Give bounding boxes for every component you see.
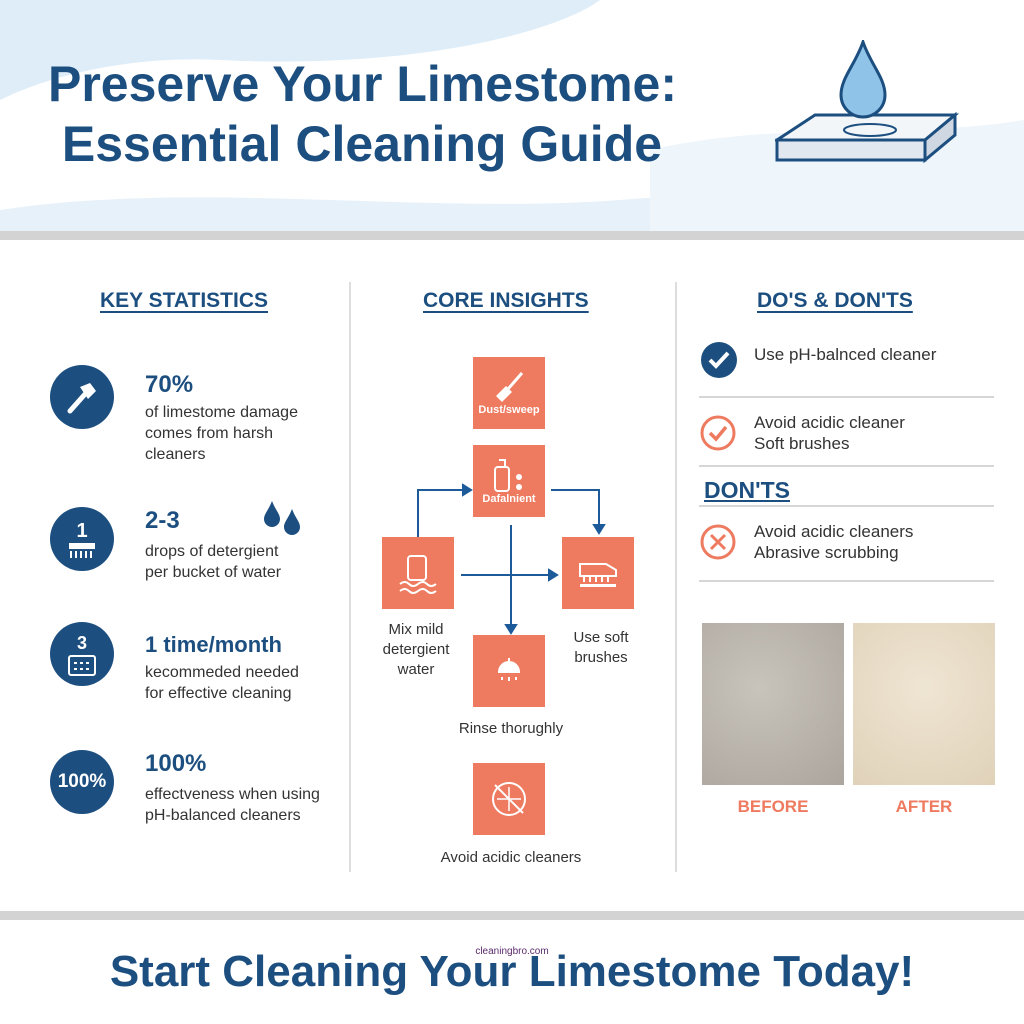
title: Preserve Your Limestome:: [48, 56, 677, 112]
stat 1: comes from harsh: [145, 425, 273, 442]
step: detergent: Dafalnient: [482, 493, 536, 505]
stat 4: effectveness when using: [145, 786, 320, 803]
dont item: Avoid acidic cleaners: [754, 522, 913, 541]
stat 1: 70%: [145, 371, 193, 398]
after image: [853, 623, 995, 785]
stat 1: cleaners: [145, 446, 205, 463]
stat 3: [50, 622, 299, 702]
title: [48, 56, 677, 172]
divider bar bottom: [0, 911, 1024, 920]
heading: core insights: CORE INSIGHTS: [423, 289, 589, 312]
stat 2: 1: [76, 520, 88, 542]
header background: [0, 0, 1024, 231]
stat 4: 100%: [145, 750, 206, 777]
panel: do's & don'ts: [699, 289, 995, 816]
step: soft brushes: brushes: [574, 649, 628, 666]
dont item: Abrasive scrubbing: [754, 543, 899, 562]
caution item: Soft brushes: [754, 434, 849, 453]
step: detergent: [473, 445, 545, 517]
do item: Use pH-balnced cleaner: [754, 345, 936, 364]
caution item: [700, 413, 905, 453]
step: mix mild detergent: detergient: [383, 641, 449, 658]
stat 4: 100%: [58, 771, 106, 792]
stat 3: 3: [77, 632, 87, 652]
stat 4: [50, 750, 320, 824]
step: soft brushes: Use soft: [573, 629, 629, 646]
stat 1: of limestome damage: [145, 404, 298, 421]
stat 2: per bucket of water: [145, 564, 281, 581]
caution item: Avoid acidic cleaner: [754, 413, 905, 432]
label before: BEFORE: [738, 797, 808, 816]
step: mix mild detergent: Mix mild: [388, 621, 444, 638]
stat 3: for effective cleaning: [145, 685, 291, 702]
title: Essential Cleaning Guide: [62, 116, 662, 172]
heading: dos & donts: DO'S & DON'TS: [757, 289, 913, 312]
stat 3: kecommeded needed: [145, 664, 299, 681]
step: dust/sweep: Dust/sweep: [478, 404, 540, 416]
step: avoid acidic: [440, 763, 581, 866]
stat 2: [50, 501, 300, 581]
do item: [701, 342, 936, 378]
divider bar top: [0, 231, 1024, 240]
icon: water drop on limestone slab: [775, 40, 959, 164]
stat 3: 1 time/month: [145, 632, 282, 657]
stat 2: 2-3: [145, 507, 180, 534]
step: rinse: Rinse thorughly: [459, 720, 563, 737]
heading: key statistics: KEY STATISTICS: [100, 289, 268, 312]
step: dust/sweep: [473, 357, 545, 429]
watermark: cleaningbro.com: [475, 946, 549, 957]
icon: drops: [264, 501, 300, 535]
step: rinse: [459, 635, 564, 737]
panel: core insights: [382, 289, 634, 866]
step: soft brushes: [562, 537, 634, 666]
footer call to action: Start Cleaning Your Limestome Today!: [110, 947, 914, 996]
panel: key statistics: [50, 289, 320, 824]
stat 1: [50, 365, 298, 463]
dont item: [700, 522, 913, 562]
step: avoid acidic: Avoid acidic cleaners: [441, 849, 581, 866]
before image: [702, 623, 844, 785]
step: mix mild detergent: water: [398, 661, 434, 678]
stat 2: drops of detergient: [145, 543, 278, 560]
stat 4: pH-balanced cleaners: [145, 807, 301, 824]
heading: donts: DON'TS: [704, 477, 790, 503]
step: mix mild detergent: [382, 537, 454, 678]
label after: AFTER: [896, 797, 952, 816]
flow arrows: [417, 483, 606, 635]
